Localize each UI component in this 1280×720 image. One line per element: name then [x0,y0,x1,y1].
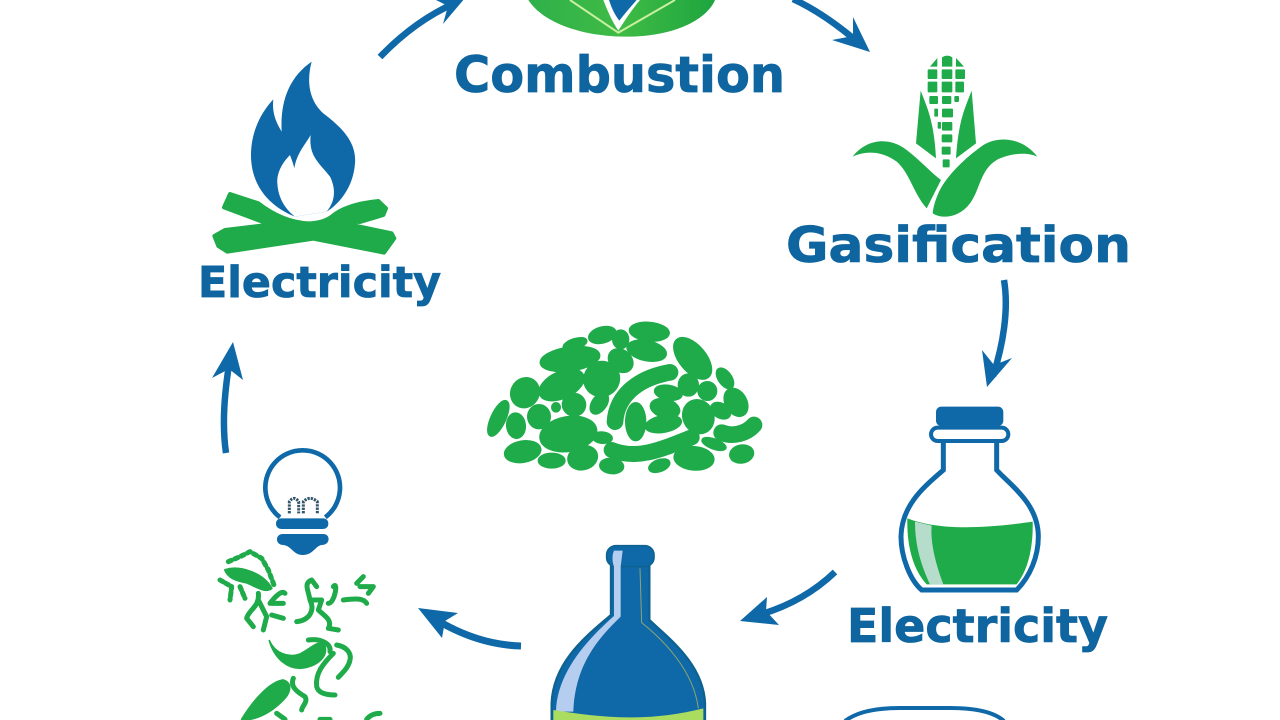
icon: green biomass pellets [484,321,754,474]
heading: Electricity (right): Electricity [847,599,1108,653]
icon: light bulb [265,450,340,555]
arrow: electricity to combustion [380,0,465,57]
heading: Electricity (left): Electricity [198,258,441,308]
icon: blue bottle [552,546,705,720]
icon: round flask with green liquid [901,407,1038,590]
arrow: bottle to microbes [418,608,521,646]
icon: corn [853,56,1037,217]
icon: top leaf [528,0,715,37]
arrow: gasification to flask [982,280,1012,387]
arrow: flask to bottle [740,572,835,625]
icon: rounded container partly visible [845,708,1004,720]
heading: Combustion: Combustion [454,46,785,104]
icon: flame over green logs [214,62,394,253]
arrow: combustion to gasification [793,0,870,52]
icon: green microbes [220,552,380,719]
arrow: microbes to electricity [212,342,243,453]
heading: Gasification: Gasification [786,217,1131,274]
